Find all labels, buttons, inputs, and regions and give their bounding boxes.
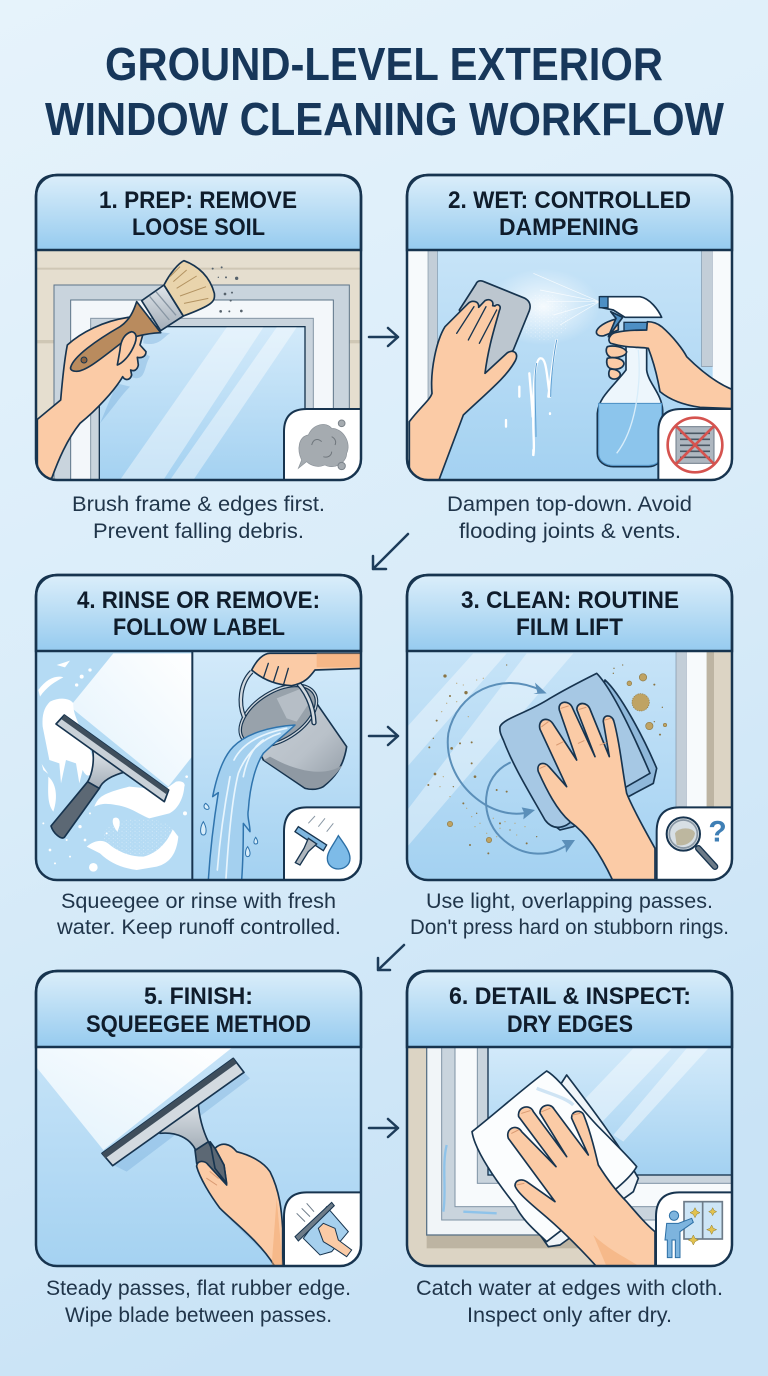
icon: squeegee: [102, 1058, 244, 1182]
arrows: overlapping wipe passes: [448, 683, 575, 854]
caption: Steady passes, flat rubber edge.: [46, 1277, 351, 1300]
panel frame and header: SQUEEGEE METHOD: [86, 1011, 311, 1038]
icon: hand: [508, 1105, 655, 1267]
soap foam: [38, 661, 188, 872]
spray mist: [504, 273, 599, 340]
panel: step 5 finish: [30, 965, 370, 1327]
panel frame and header: DAMPENING: [499, 214, 639, 241]
caption: Use light, overlapping passes.: [426, 890, 713, 913]
illustration: brushing window frame: [37, 251, 360, 479]
badge: magnifier and question mark: [656, 806, 731, 879]
arrow: step 3 to step 5: [378, 945, 404, 970]
illustration: squeegee and bucket: [37, 652, 360, 879]
icon: hand: [538, 702, 655, 882]
caption: flooding joints & vents.: [459, 520, 681, 543]
arrow: step 4 to step 3: [369, 727, 398, 745]
panel: step 6 detail and inspect: [400, 965, 740, 1327]
panel frame and header: 3. CLEAN: ROUTINE: [461, 587, 679, 614]
panel frame and header: [36, 575, 361, 880]
panel: step 1 prep: [30, 170, 370, 543]
badge: person inspecting window: [655, 1191, 731, 1265]
badge: wiping blade: [283, 1191, 360, 1265]
caption: Prevent falling debris.: [93, 520, 304, 543]
caption: [46, 1277, 351, 1327]
caption: [56, 890, 341, 939]
icon: sponge: [459, 281, 530, 375]
panel: step 2 wet: [400, 170, 740, 543]
title: [45, 38, 725, 145]
speckled grime: [427, 664, 663, 854]
icon: squeegee: [51, 715, 169, 838]
arrow: step 1 to step 2: [369, 328, 398, 346]
caption: [410, 890, 729, 939]
panel frame and header: [407, 971, 732, 1266]
caption: [416, 1277, 723, 1327]
illustration: sponge and spray bottle: [408, 251, 731, 479]
caption: Wipe blade between passes.: [65, 1304, 332, 1327]
panel frame and header: 1. PREP: REMOVE: [99, 187, 297, 214]
title: GROUND-LEVEL EXTERIOR: [105, 38, 663, 90]
panel: step 4 rinse or remove: [30, 570, 370, 939]
arrow: step 5 to step 6: [369, 1119, 398, 1137]
badge: dust cloud: [283, 408, 360, 479]
caption: Dampen top-down. Avoid: [447, 493, 692, 516]
icon: white cloth: [540, 1074, 640, 1248]
caption: water. Keep runoff controlled.: [56, 916, 341, 939]
caption: [72, 493, 325, 543]
panel frame and header: 6. DETAIL & INSPECT:: [449, 983, 691, 1010]
badge: no flooding vents: [657, 408, 731, 479]
icon: hand holding bucket: [241, 653, 363, 723]
panel frame and header: 4. RINSE OR REMOVE:: [77, 587, 320, 614]
panel: step 3 clean: [400, 570, 740, 939]
icon: spray bottle and hand: [596, 297, 733, 467]
arrow: step 2 to step 3: [373, 534, 408, 569]
icon: hand: [37, 317, 146, 478]
icon: microfiber cloth: [543, 680, 657, 830]
caption: Don't press hard on stubborn rings.: [410, 916, 729, 939]
caption: Squeegee or rinse with fresh: [61, 890, 336, 913]
caption: Brush frame & edges first.: [72, 493, 325, 516]
badge: magnifier and question mark: ?: [708, 816, 727, 849]
illustration: squeegee stroke: [37, 1048, 360, 1265]
panel frame and header: [36, 175, 361, 480]
panel frame and header: FILM LIFT: [516, 614, 623, 641]
icon: paint brush: [71, 261, 214, 371]
icon: hand: [197, 1144, 283, 1267]
dust particles: [212, 266, 243, 313]
illustration: drying window edges: [408, 1048, 731, 1265]
panel frame and header: FOLLOW LABEL: [113, 614, 285, 641]
brown mineral spots: [447, 674, 667, 843]
badge: squeegee and water drop: [283, 806, 360, 879]
icon: bucket: [238, 684, 348, 790]
caption: Catch water at edges with cloth.: [416, 1277, 723, 1300]
panel frame and header: DRY EDGES: [507, 1011, 633, 1038]
icon: hand on sponge: [409, 300, 517, 482]
panel frame and header: 5. FINISH:: [144, 983, 253, 1010]
illustration: cloth wiping film: [408, 652, 731, 879]
panel frame and header: 2. WET: CONTROLLED: [448, 187, 691, 214]
water drips: [506, 340, 557, 455]
caption: Inspect only after dry.: [467, 1304, 672, 1327]
panel frame and header: [407, 575, 732, 880]
panel frame and header: [407, 175, 732, 480]
panel frame and header: [36, 971, 361, 1266]
panel frame and header: LOOSE SOIL: [132, 214, 265, 241]
icon: pouring water: [201, 725, 295, 880]
caption: [447, 493, 692, 543]
